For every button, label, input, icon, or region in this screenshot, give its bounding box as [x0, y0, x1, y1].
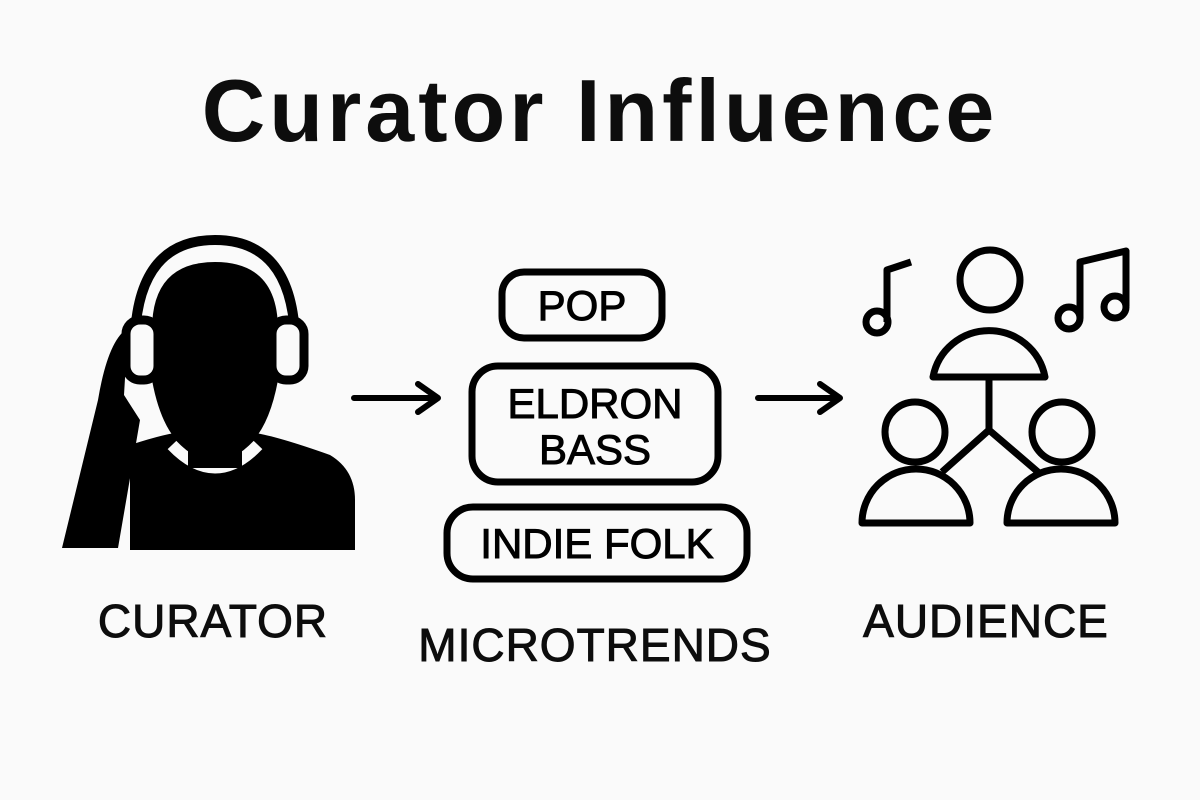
pill: POP: POP	[538, 282, 626, 329]
label: MICROTRENDS: MICROTRENDS	[418, 619, 772, 671]
pill: INDIE FOLK	[447, 507, 747, 579]
pill: ELDRON BASS	[472, 366, 718, 482]
pill: INDIE FOLK: INDIE FOLK	[480, 520, 714, 567]
label: AUDIENCE: AUDIENCE	[863, 595, 1109, 647]
icon: music notes	[866, 251, 1126, 333]
pill: POP	[502, 272, 662, 338]
arrow: microtrends to audience	[758, 384, 840, 412]
icon: audience network	[862, 250, 1126, 523]
arrow: curator to microtrends	[354, 384, 438, 412]
pill: ELDRON BASS: ELDRON	[507, 380, 683, 427]
icon: curator with headphones	[62, 240, 355, 550]
label: CURATOR: CURATOR	[98, 595, 328, 647]
title: Curator Influence	[202, 61, 998, 160]
pill: ELDRON BASS: BASS	[539, 426, 651, 473]
